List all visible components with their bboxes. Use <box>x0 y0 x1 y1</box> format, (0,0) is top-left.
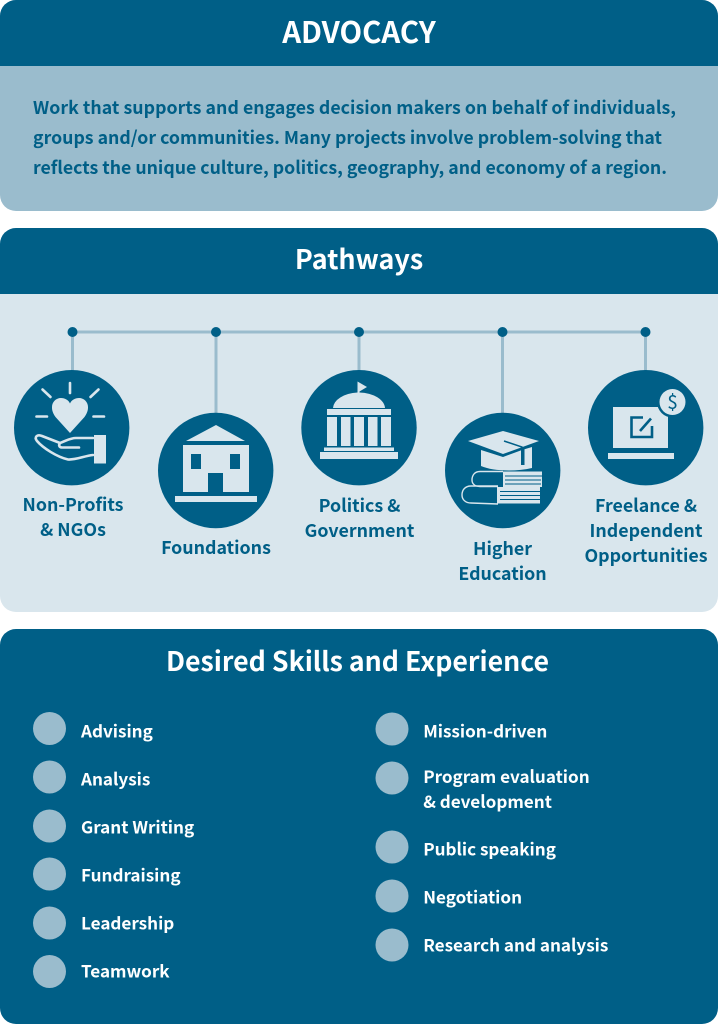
heading: advocacy: ADVOCACY <box>281 10 437 52</box>
icon: heart in open hand <box>14 370 129 485</box>
skill: mission-driven <box>376 712 547 746</box>
label: freelance <box>584 492 708 568</box>
skill: research <box>376 928 608 962</box>
skill: program evaluation: Program evaluation <box>423 763 590 788</box>
label: non-profits: Non-Profits <box>23 491 124 517</box>
pathway connector timeline <box>68 327 650 415</box>
label: non-profits <box>23 491 124 542</box>
skill: grant writing: Grant Writing <box>81 814 194 838</box>
advocacy description: Work that supports and engages decision makers on behalf of individuals, <box>33 94 676 120</box>
skill: program evaluation: & development <box>423 788 552 813</box>
skill: leadership: Leadership <box>81 910 174 934</box>
label: freelance: Opportunities <box>584 542 708 568</box>
skill: teamwork: Teamwork <box>81 958 170 982</box>
skill: fundraising <box>33 858 181 890</box>
label: politics <box>305 492 415 543</box>
skill: analysis <box>33 760 150 794</box>
skill: leadership <box>33 906 174 940</box>
icon: freelance laptop with dollar coin <box>588 370 703 485</box>
pathways header bar <box>0 228 718 294</box>
advocacy description: reflects the unique culture, politics, geography, and economy of a region. <box>33 154 667 180</box>
icon: government capitol <box>301 370 417 485</box>
heading: pathways: Pathways <box>295 238 423 277</box>
skill: advising: Advising <box>80 718 153 742</box>
skill: negotiation: Negotiation <box>423 884 522 908</box>
skill: teamwork <box>33 955 170 988</box>
advocacy description: groups and/or communities. Many projects involve problem-solving that <box>33 124 663 150</box>
skill: advising <box>33 712 153 745</box>
label: freelance: Independent <box>590 517 703 543</box>
skills list: right column <box>376 712 608 962</box>
label: higher education: Education <box>458 560 547 586</box>
panel: desired skills <box>0 629 718 1024</box>
skill: grant writing <box>33 810 194 842</box>
skill: research: Research and analysis <box>423 932 608 956</box>
skill: fundraising: Fundraising <box>81 862 181 886</box>
skill: analysis: Analysis <box>80 766 150 790</box>
advocacy header bar <box>0 0 718 66</box>
icon: foundation building <box>158 413 273 528</box>
advocacy description <box>33 94 676 180</box>
panel: advocacy <box>0 0 718 211</box>
skills list: left column <box>33 712 194 988</box>
heading: desired skills: Desired Skills and Experience <box>166 640 549 679</box>
label: politics: Government <box>305 517 415 543</box>
label: freelance: Freelance & <box>595 492 697 518</box>
icon: graduation cap and books <box>445 413 560 528</box>
panel: pathways <box>0 228 718 612</box>
skill: negotiation <box>376 880 522 912</box>
label: non-profits: & NGOs <box>40 516 106 542</box>
label: foundations: Foundations <box>161 534 271 560</box>
skill: public speaking <box>376 830 556 864</box>
icon: freelance laptop with dollar coin: $ <box>667 388 678 415</box>
label: politics: Politics & <box>319 492 400 518</box>
label: higher education: Higher <box>473 535 532 561</box>
skill: public speaking: Public speaking <box>423 836 556 860</box>
skill: mission-driven: Mission-driven <box>423 718 547 742</box>
skill: program evaluation <box>376 762 590 813</box>
label: higher education <box>458 535 547 586</box>
